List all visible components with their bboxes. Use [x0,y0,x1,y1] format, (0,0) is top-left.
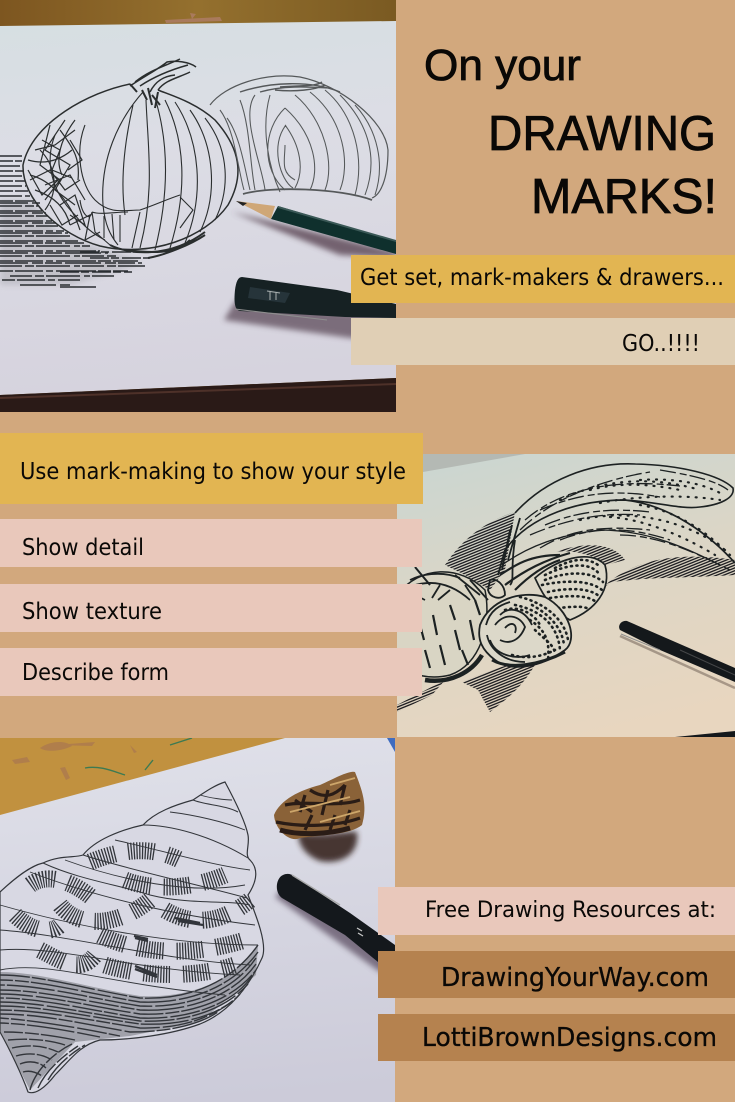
onion cast shadow hatching [0,156,150,287]
pencil shadow [232,212,396,258]
list item: describe form: Describe form [22,660,169,686]
orange [479,595,571,667]
whole onion [23,59,238,258]
photo: fruit drawing [397,454,735,737]
list item: show detail [0,519,422,567]
list item: describe form [0,648,422,696]
real shell [274,772,364,839]
shell outline [0,782,264,1093]
bananas [498,464,735,590]
title: DRAWING [488,107,716,161]
banner: go: GO..!!!! [622,331,700,357]
list item: show texture: Show texture [22,599,162,625]
black fineliner pen [235,277,396,320]
shell dark band [0,945,258,1090]
banner: mark-making style [0,433,423,504]
banner: free resources: Free Drawing Resources at: [425,898,716,923]
banner: get set [351,255,735,303]
banner: go [351,318,735,365]
title: On your [424,41,581,90]
painted table corner [0,738,395,815]
drawn whelk shell [0,782,264,1093]
banner: mark-making style: Use mark-making to show your style [20,459,406,485]
link: DrawingYourWay.com [378,951,735,998]
apple [397,567,505,681]
photo: onion drawing [0,0,396,412]
hatch shadows [445,512,515,590]
pen [619,621,735,737]
link: DrawingYourWay.com: DrawingYourWay.com [441,963,709,993]
title: MARKS! [531,170,717,224]
hatch marks: thick dashed strokes form short parallel lines [15,851,250,974]
link: LottiBrownDesigns.com [378,1014,735,1061]
pencil [236,201,396,254]
pen shadow [272,889,378,974]
link: LottiBrownDesigns.com: LottiBrownDesigns.com [422,1023,717,1053]
list item: show detail: Show detail [22,535,144,561]
lemon [535,557,607,620]
list item: show texture [0,584,422,632]
pen shadow [224,300,396,340]
banner: free resources [378,887,735,935]
title [424,41,717,224]
cut onion [210,76,388,200]
photo: shell drawing [0,738,395,1102]
real shell shadow [298,832,357,862]
pen [277,874,395,962]
